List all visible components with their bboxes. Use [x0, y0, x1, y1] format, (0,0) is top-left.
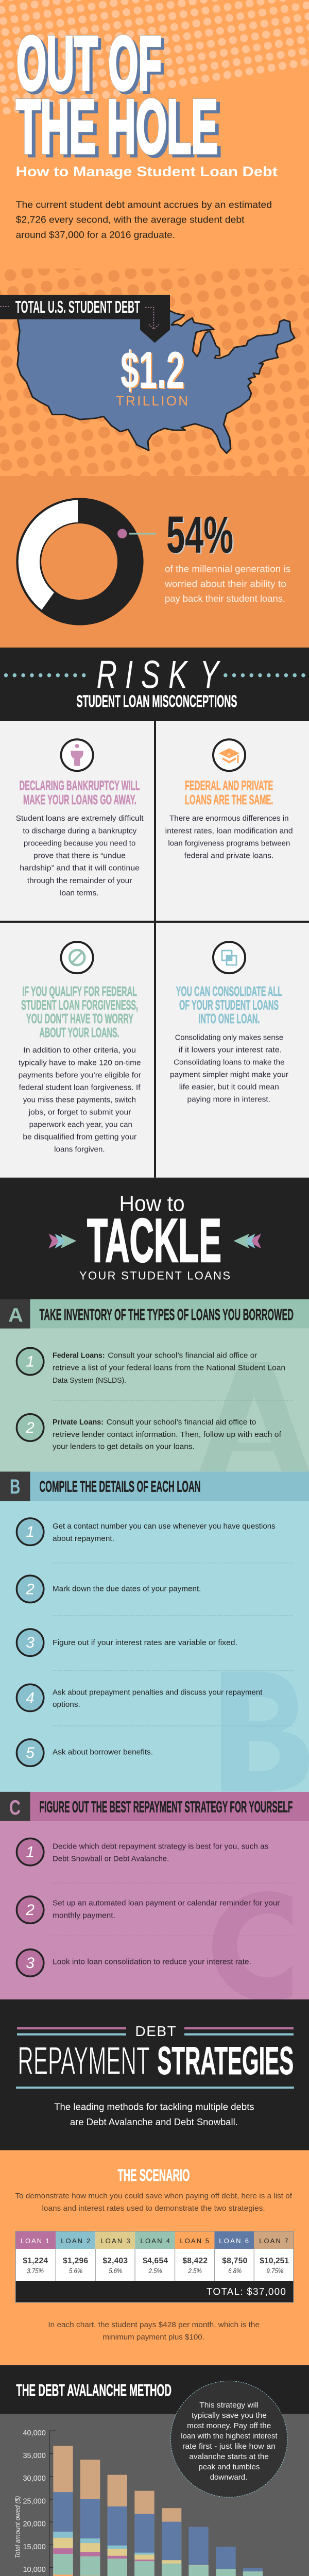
y axis labels: 20,000	[23, 2520, 46, 2529]
misconception: consolidation	[170, 942, 288, 1104]
misconception: bankruptcy	[16, 739, 144, 897]
step: private loans: your lenders to get details on your loans.	[53, 1443, 195, 1451]
body text: through the remainder of your	[27, 876, 132, 885]
body text: In addition to other criteria, you	[23, 1046, 136, 1055]
body text: loan forgiveness programs between	[168, 839, 290, 848]
step: loan consolidation: 3	[26, 1955, 35, 1972]
table: seven loans: $4,654	[143, 2257, 168, 2265]
table: seven loans	[15, 2231, 294, 2302]
y axis labels: 40,000	[23, 2429, 46, 2437]
panel: misconceptions grid	[0, 721, 309, 1178]
body text: you miss these payments, switch	[23, 1095, 136, 1104]
table: seven loans: $10,251	[260, 2257, 289, 2265]
panel: step A	[0, 1299, 309, 1471]
chart axes	[49, 2431, 294, 2576]
callout: avalanche strategy: rate first - just like how an	[182, 2442, 276, 2451]
misconception: federal and private	[165, 739, 293, 860]
callout: avalanche strategy: loan with the highest interest	[181, 2432, 278, 2441]
callout: avalanche strategy: avalanche starts at the	[189, 2452, 269, 2461]
body text: There are enormous differences in	[169, 814, 289, 823]
y axis labels: 35,000	[23, 2452, 46, 2460]
step: borrower benefits: 5	[26, 1744, 35, 1761]
icon: overlapping squares	[213, 942, 245, 973]
body text: interest rates, loan modification and	[165, 826, 293, 836]
table: seven loans: 2.5%	[188, 2267, 202, 2275]
body text: proceeding because you need to	[24, 839, 135, 848]
step: borrower benefits: Ask about borrower benefits.	[53, 1748, 153, 1757]
panel: step C	[0, 1792, 309, 2002]
step: prepayment penalties	[16, 1684, 263, 1711]
y axis labels: 10,000	[23, 2566, 46, 2574]
step: loan consolidation: Look into loan consolidation to reduce your interest rate.	[53, 1958, 251, 1966]
step: due dates: 2	[25, 1581, 35, 1598]
stat: $1.2 trillion: $1.2	[122, 343, 185, 400]
table: seven loans: 5.6%	[69, 2267, 82, 2275]
table: seven loans: $1,224	[23, 2257, 48, 2265]
table: seven loans: LOAN 3	[100, 2237, 130, 2245]
step: federal loans: retrieve a list of your federal loans from the National Student Loan	[53, 1364, 285, 1372]
step: federal loans: Federal Loans:	[53, 1351, 105, 1360]
table: seven loans: TOTAL: $37,000	[207, 2287, 286, 2298]
table: seven loans: 9.75%	[266, 2267, 283, 2275]
chart bars	[63, 2446, 280, 2576]
step: federal loans: Data System (NSLDS).	[53, 1376, 126, 1385]
table: seven loans: $8,750	[222, 2257, 247, 2265]
header bar C	[0, 1792, 309, 1821]
y axis labels	[23, 2429, 46, 2576]
step: automated payment	[16, 1896, 280, 1923]
step: interest rates: Figure out if your interest rates are variable or fixed.	[53, 1638, 237, 1647]
panel: avalanche chart area	[0, 2381, 309, 2576]
step: contact number: Get a contact number you can use whenever you have questions	[53, 1522, 276, 1531]
body text: hardship” and that it will continue	[20, 864, 140, 873]
body text: loan terms.	[60, 889, 98, 897]
step: private loans: retrieve lender contact information. Then, follow up with each of	[53, 1430, 282, 1439]
body text: typically have to make 120 on-time	[19, 1058, 141, 1067]
body text: paying more in interest.	[187, 1095, 270, 1104]
callout: avalanche strategy: peak and tumbles	[198, 2463, 260, 2471]
header bar A: A	[8, 1305, 23, 1327]
panel: 54 percent of millennials	[0, 476, 309, 648]
body text	[170, 1033, 288, 1104]
panel: hero header	[0, 0, 309, 476]
step: prepayment penalties: Ask about prepayment penalties and discuss your repayment	[53, 1688, 263, 1697]
scenario text	[15, 2192, 293, 2213]
icon: person	[61, 739, 93, 771]
heading: MAKE YOUR LOANS GO AWAY.	[23, 792, 136, 807]
heading: risky student loan misconceptions: RISKY	[97, 653, 221, 697]
callout: avalanche strategy: This strategy will	[199, 2401, 259, 2410]
panel: step B	[0, 1471, 309, 1792]
table: seven loans: $8,422	[182, 2257, 208, 2265]
table: seven loans: 3.75%	[27, 2267, 44, 2275]
title: out of the hole: OUT OF	[16, 21, 162, 106]
heading: THE SCENARIO	[117, 2166, 190, 2184]
callout: avalanche strategy: typically save you the	[192, 2411, 267, 2420]
step: borrower benefits	[16, 1739, 153, 1766]
heading: how to tackle your student loans: YOUR STUDENT LOANS	[79, 1269, 230, 1282]
step: federal loans: 1	[26, 1353, 35, 1370]
stat description: of the millennial generation is	[165, 564, 290, 574]
heading: the debt avalanche method	[0, 2365, 309, 2414]
title: out of the hole: OUT OF	[16, 21, 162, 106]
step: decide strategy: Debt Snowball or Debt Avalanche.	[53, 1855, 169, 1863]
callout: avalanche strategy: downward.	[210, 2473, 247, 2482]
body text: payments before you’re eligible for	[19, 1071, 141, 1079]
step: federal loans	[16, 1348, 285, 1385]
stat: 54%: 54%	[166, 506, 233, 564]
body text: federal student loan forgiveness. If	[19, 1083, 141, 1092]
stat: $1.2 trillion: TRILLION	[116, 393, 188, 409]
title: out of the hole	[16, 21, 221, 172]
table: seven loans: 6.8%	[228, 2267, 242, 2275]
step: contact number	[16, 1518, 276, 1545]
step: interest rates	[16, 1629, 237, 1656]
intro paragraph: around $37,000 for a 2016 graduate.	[16, 230, 175, 240]
step: interest rates: 3	[26, 1634, 35, 1651]
step: prepayment penalties: 4	[26, 1689, 35, 1706]
body text: be disqualified from getting your	[23, 1132, 136, 1141]
icon: graduation cap	[213, 739, 245, 771]
heading: risky student loan misconceptions	[0, 648, 309, 721]
heading: debt repayment strategies	[0, 1999, 309, 2150]
body text: paperwork each year, you can	[29, 1120, 132, 1129]
heading: the debt avalanche method: THE DEBT AVALANCHE METHOD	[16, 2381, 171, 2400]
table: seven loans: LOAN 6	[219, 2237, 249, 2245]
heading: YOU DON’T HAVE TO WORRY	[26, 1011, 133, 1026]
label: total U.S. student debt	[0, 295, 170, 343]
intro text	[54, 2102, 254, 2127]
label: total U.S. student debt: TOTAL U.S. STUDENT DEBT	[15, 297, 140, 316]
body text: life easier, but it could mean	[179, 1082, 279, 1091]
heading: IF YOU QUALIFY FOR FEDERAL	[22, 984, 137, 999]
step: due dates: Mark down the due dates of your payment.	[53, 1585, 201, 1594]
table: seven loans: $1,296	[63, 2257, 88, 2265]
stat description: worried about their ability to	[164, 579, 286, 589]
donut chart	[16, 498, 156, 625]
table: seven loans: LOAN 7	[259, 2237, 288, 2245]
step: contact number: 1	[26, 1523, 35, 1540]
scenario note	[48, 2320, 260, 2342]
y axis title: Total amount owed ($)	[14, 2496, 21, 2558]
step: private loans: Private Loans:	[53, 1418, 104, 1427]
body text: payment simpler might make your	[170, 1070, 288, 1079]
step: private loans: 2	[25, 1419, 35, 1436]
header bar B: B	[10, 1476, 20, 1498]
heading	[176, 984, 282, 1026]
step: contact number: about repayment.	[53, 1534, 114, 1543]
table: seven loans: LOAN 5	[180, 2237, 209, 2245]
table: seven loans: 2.5%	[148, 2267, 162, 2275]
subtitle: How to Manage Student Loan Debt	[16, 164, 278, 179]
heading: DECLARING BANKRUPTCY WILL	[20, 778, 140, 793]
body text	[19, 1046, 141, 1154]
callout: avalanche strategy: most money. Pay off the	[187, 2421, 271, 2430]
header bar C: C	[9, 1797, 21, 1819]
stat: 54%: 54%	[168, 507, 235, 565]
heading: STUDENT LOAN FORGIVENESS,	[21, 997, 138, 1013]
body text: loans forgiven.	[54, 1145, 105, 1154]
table: seven loans: LOAN 2	[61, 2237, 90, 2245]
table: seven loans: $2,403	[102, 2257, 128, 2265]
step: decide strategy: 1	[26, 1844, 35, 1861]
body text: Consolidating loans to make the	[174, 1058, 285, 1066]
stat: 54%	[166, 506, 235, 565]
heading: INTO ONE LOAN.	[198, 1011, 260, 1026]
heading: how to tackle your student loans	[0, 1178, 309, 1299]
step: automated payment: Set up an automated loan payment or calendar reminder for your	[53, 1899, 280, 1908]
body text: federal and private loans.	[184, 852, 273, 860]
heading: debt repayment strategies: REPAYMENT	[18, 2039, 150, 2083]
intro paragraph	[16, 200, 272, 240]
scenario note: In each chart, the student pays $428 per month, which is the	[48, 2320, 260, 2329]
panel: the scenario	[0, 2150, 309, 2365]
body text	[165, 814, 293, 860]
body text: if it lowers your interest rate.	[179, 1046, 282, 1054]
table: seven loans: LOAN 4	[140, 2237, 170, 2245]
step: federal loans: Consult your school’s financial aid office or	[108, 1351, 257, 1360]
heading	[20, 778, 140, 807]
step: automated payment: monthly payment.	[53, 1911, 115, 1920]
header bar B	[0, 1471, 309, 1501]
intro text: The leading methods for tackling multiple debts	[54, 2102, 254, 2112]
y axis labels: 25,000	[23, 2497, 46, 2505]
scenario text: loans and interest rates used to demonstrate the two strategies.	[42, 2204, 265, 2213]
y axis labels: 30,000	[23, 2475, 46, 2483]
heading	[185, 778, 273, 807]
heading: how to tackle your student loans: How to	[119, 1192, 185, 1216]
icon: prohibited sign	[61, 942, 93, 973]
intro paragraph: $2,726 every second, with the average student debt	[16, 214, 244, 225]
intro text: are Debt Avalanche and Debt Snowball.	[70, 2117, 238, 2127]
callout: avalanche strategy	[170, 2381, 287, 2497]
header bar A	[0, 1299, 309, 1329]
icon: arrows	[49, 1234, 261, 1248]
chart: avalanche stacked bars	[14, 2429, 294, 2576]
misconception: loan forgiveness	[19, 942, 141, 1154]
table: seven loans: 5.6%	[109, 2267, 122, 2275]
step: prepayment penalties: options.	[53, 1700, 80, 1709]
heading: debt repayment strategies: DEBT	[135, 2023, 176, 2039]
body text	[16, 814, 144, 897]
step: due dates	[16, 1575, 201, 1602]
body text: to discharge during a bankruptcy	[23, 826, 137, 836]
body text: Consolidating only makes sense	[175, 1033, 283, 1042]
title: out of the hole: OUT OF	[20, 24, 165, 109]
heading: ABOUT YOUR LOANS.	[39, 1025, 119, 1040]
step: loan consolidation	[16, 1950, 251, 1976]
body text: jobs, or forget to submit your	[28, 1108, 131, 1117]
stat: $1.2 trillion	[116, 342, 188, 409]
y axis labels: 15,000	[23, 2543, 46, 2551]
stat: $1.2 trillion: $1.2	[121, 342, 184, 399]
step: automated payment: 2	[25, 1902, 35, 1919]
map: United States total debt	[0, 295, 295, 453]
scenario text: To demonstrate how much you could save when paying off debt, here is a list of	[15, 2192, 293, 2200]
step: private loans: Consult your school’s financial aid office to	[107, 1418, 256, 1427]
body text: prove that there is “undue	[33, 852, 126, 860]
stat description	[164, 564, 290, 604]
heading	[21, 984, 138, 1040]
step: private loans	[16, 1414, 282, 1451]
icon: graduation cap: $	[228, 752, 231, 758]
step: decide strategy	[16, 1838, 268, 1866]
step: decide strategy: Decide which debt repayment strategy is best for you, such as	[53, 1842, 268, 1851]
intro paragraph: The current student debt amount accrues by an estimated	[16, 200, 272, 210]
body text: Student loans are extremely difficult	[16, 814, 144, 823]
table: seven loans: LOAN 1	[21, 2237, 49, 2245]
stat description: pay back their student loans.	[165, 594, 285, 604]
scenario note: minimum payment plus $100.	[102, 2333, 204, 2342]
